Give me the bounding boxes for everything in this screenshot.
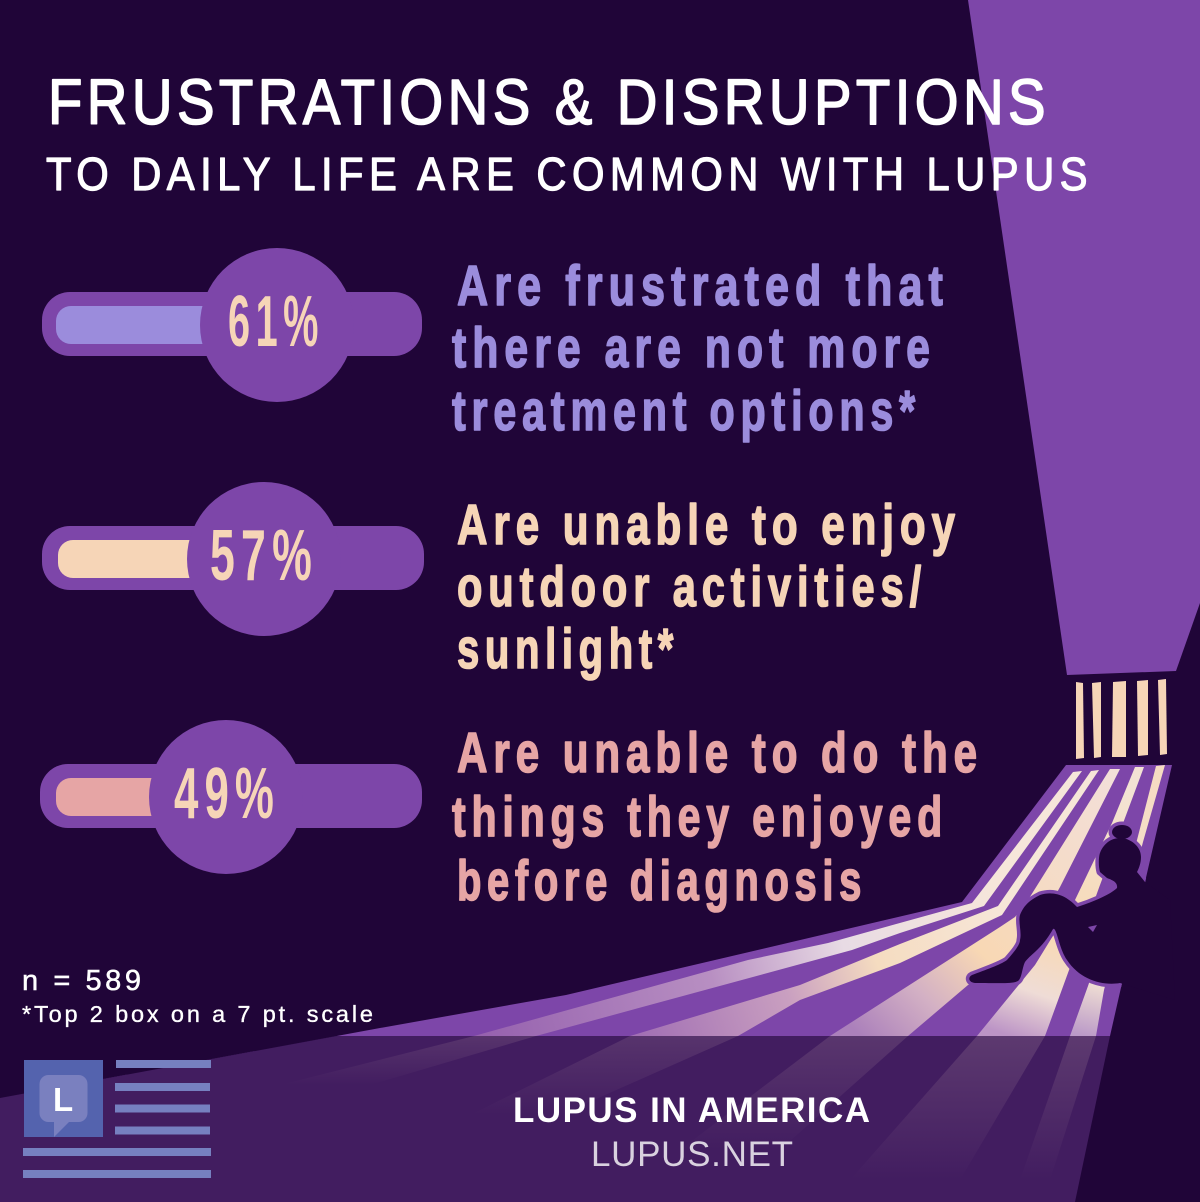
stat 49%: 49% [174,754,280,834]
floor: light rays on the ground [0,765,1172,1098]
stat 57%: 57% [210,516,318,596]
text: treatment options [452,254,949,443]
stat 61%: 61% [228,282,324,362]
text: outdoor activities [457,493,961,681]
footer brand text: LUPUS IN AMERICA [513,1091,870,1130]
text: outdoor activities: outdoor activities/ [457,555,927,619]
title: FRUSTRATIONS & DISRUPTIONS [48,66,1050,138]
logo: lupus flag: L [53,1081,73,1118]
footnote: n = 589 [22,965,141,997]
silhouette: seated person [966,822,1146,987]
window bars [1076,679,1167,759]
text: treatment options: treatment options* [452,379,921,443]
text: before diagnosis [452,721,983,913]
footer brand text: LUPUS.NET [591,1135,793,1174]
stat 57% [42,482,424,636]
footnote: *Top 2 box on a 7 pt. scale [22,1001,373,1027]
text: before diagnosis: before diagnosis [457,849,867,913]
text: outdoor activities: sunlight* [457,617,679,681]
text: before diagnosis: Are unable to do the [457,721,983,785]
stat 61% [42,248,422,402]
text: before diagnosis: things they enjoyed [452,785,948,849]
footnote [22,965,373,1027]
stat 49% [40,720,422,874]
logo: lupus flag [23,1060,211,1178]
title [46,66,1093,200]
curtain: purple light beam [968,0,1200,675]
title: TO DAILY LIFE ARE COMMON WITH LUPUS [46,148,1093,200]
footer brand text [513,1091,870,1174]
text: outdoor activities: Are unable to enjoy [457,493,961,557]
text: treatment options: there are not more [452,316,936,380]
footer band over floor [0,1036,1110,1202]
text: treatment options: Are frustrated that [457,254,949,318]
